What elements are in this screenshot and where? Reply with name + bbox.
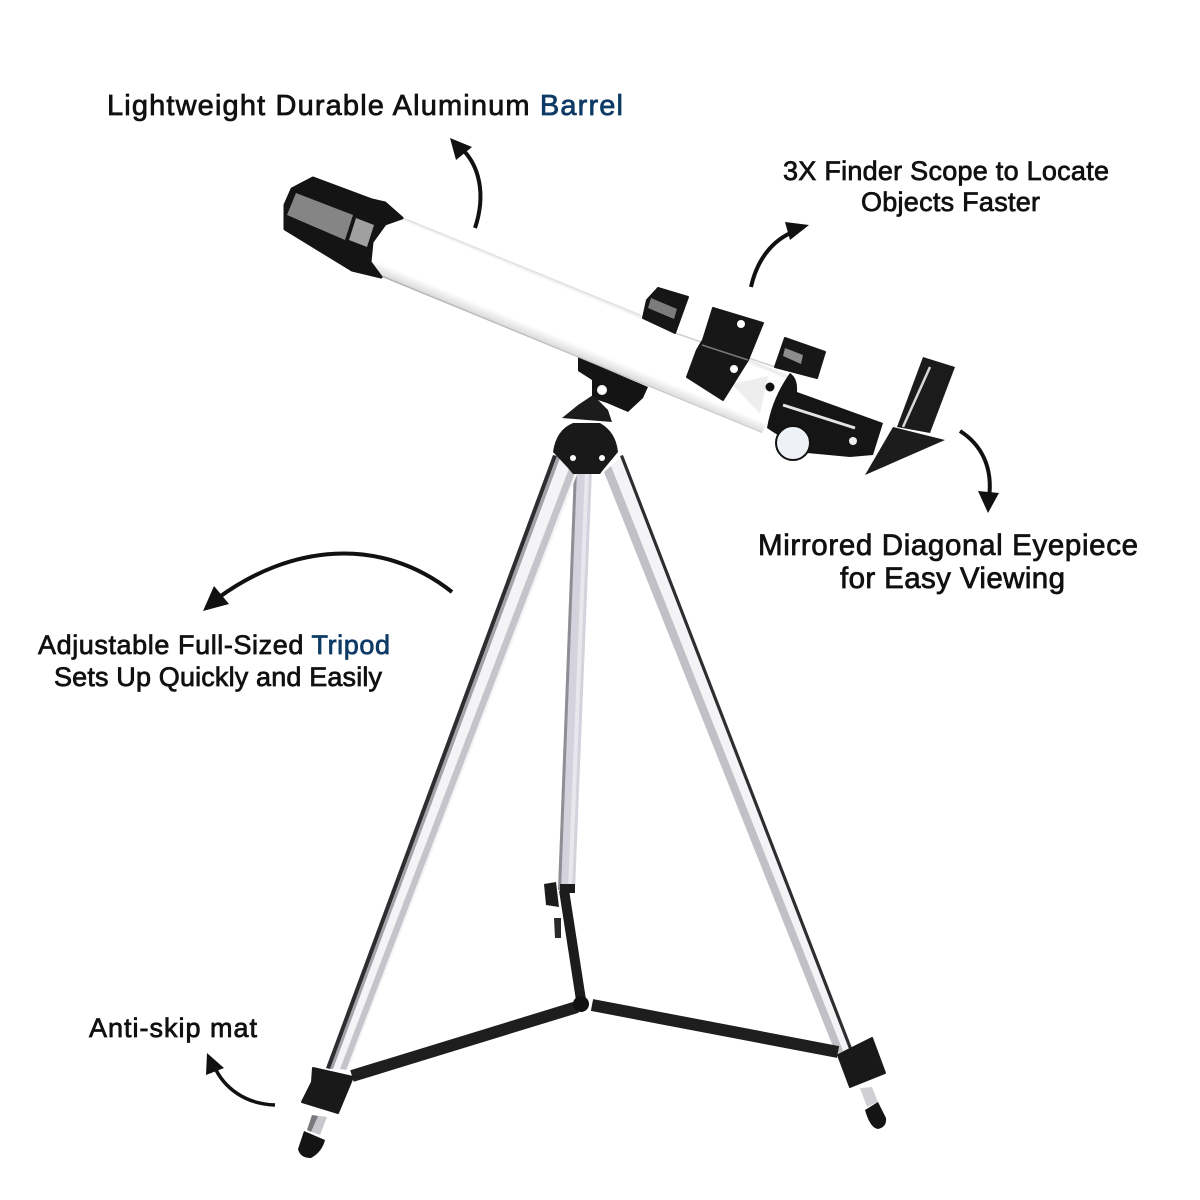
text: anti-skip mat label: Anti-skip mat xyxy=(89,1013,257,1043)
heading: lightweight barrel label: Lightweight Durable Aluminum Barrel xyxy=(107,90,623,122)
tripod: left foot clamp and tip xyxy=(298,1068,353,1158)
text: finder scope label: 3X Finder Scope to Locate xyxy=(783,156,1109,186)
tripod: center leg xyxy=(558,470,592,890)
tripod: lower center strut and clamp xyxy=(544,882,581,1000)
text: tripod label: Sets Up Quickly and Easily xyxy=(54,662,382,692)
telescope: focuser tube with knob xyxy=(766,373,883,460)
telescope: mirrored diagonal eyepiece xyxy=(865,357,955,475)
text: eyepiece label: for Easy Viewing xyxy=(840,562,1065,595)
tripod: right foot clamp and tip xyxy=(838,1038,886,1129)
text: finder scope label xyxy=(783,156,1109,217)
arrow: finder scope xyxy=(751,222,809,287)
telescope: main white tube xyxy=(373,218,790,433)
telescope: objective dew cap xyxy=(285,178,402,277)
text: finder scope label: Objects Faster xyxy=(861,187,1040,217)
arrow: anti-skip mat xyxy=(206,1053,275,1105)
text: eyepiece label: Mirrored Diagonal Eyepiece xyxy=(758,529,1138,562)
telescope: finder scope xyxy=(643,288,825,400)
text: tripod label: Adjustable Full-Sized Tripod xyxy=(38,630,390,660)
arrow: tripod xyxy=(203,554,452,611)
text: tripod label xyxy=(38,630,390,692)
tripod: left leg xyxy=(326,455,578,1070)
tripod: right leg xyxy=(604,455,852,1054)
text: eyepiece label xyxy=(758,529,1138,595)
tripod: spreader bars xyxy=(352,996,838,1076)
telescope: mount plate and head xyxy=(553,357,648,474)
arrow: barrel xyxy=(450,138,480,228)
arrow: diagonal eyepiece xyxy=(960,431,999,513)
